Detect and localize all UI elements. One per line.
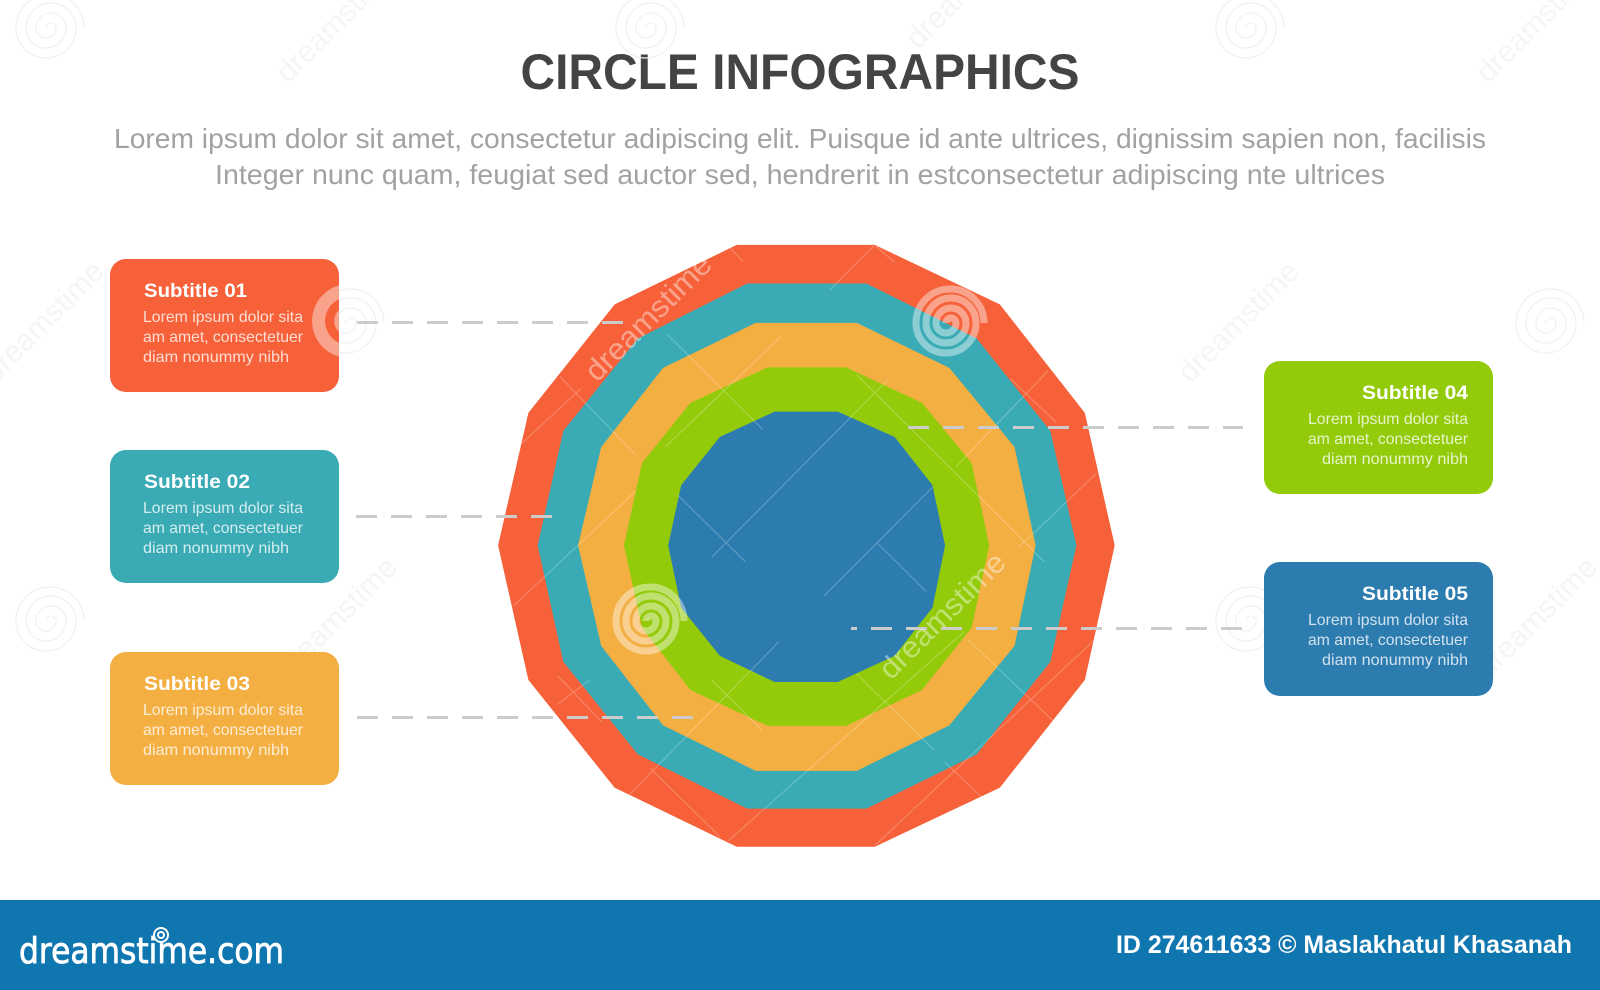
watermark part over card 1 edge (312, 285, 339, 357)
card 1: Subtitle 01 (144, 281, 247, 302)
card 5 (1264, 562, 1493, 696)
subtitle text: Lorem ipsum dolor sit amet, consectetur adipiscing elit. Puisque id ante ultrices, dignissim sapien non, facilisis (114, 123, 1486, 154)
card 4: Lorem ipsum dolor sita (1308, 411, 1468, 428)
connector line 5 (851, 627, 1243, 630)
card 3: Lorem ipsum dolor sita (143, 702, 303, 719)
card 1 (110, 259, 339, 392)
card 1: am amet, consectetuer (143, 329, 304, 346)
ring 3: amber (578, 323, 1036, 771)
text: dreamstime (270, 551, 404, 685)
connector line 1 (357, 321, 623, 324)
card 1: diam nonummy nibh (143, 349, 289, 366)
footer bar (0, 900, 1600, 990)
card 4 (1264, 361, 1493, 494)
faint page watermarks (16, 0, 1584, 651)
connector line 4 (908, 426, 1243, 429)
subtitle text (114, 123, 1486, 190)
watermark overlays on the diagram: dreamstime (873, 546, 1013, 686)
title: CIRCLE INFOGRAPHICS (520, 44, 1080, 100)
footer logo: dreamstime.com (19, 931, 284, 972)
card 3: Subtitle 03 (144, 674, 250, 695)
card 5: diam nonummy nibh (1322, 652, 1468, 669)
concentric polygon diagram (498, 245, 1115, 847)
watermark overlays on the diagram: dreamstime (579, 248, 719, 388)
connector line 2 (356, 515, 552, 518)
ring 2: teal (538, 283, 1076, 809)
card 4: Subtitle 04 (1362, 383, 1468, 404)
subtitle text: Integer nunc quam, feugiat sed auctor sed, hendrerit in estconsectetur adipiscing nte ultrices (215, 159, 1385, 190)
card 2: am amet, consectetuer (143, 520, 304, 537)
card 5: Lorem ipsum dolor sita (1308, 612, 1468, 629)
card 5: am amet, consectetuer (1308, 632, 1469, 649)
ring 5: blue core (668, 412, 945, 682)
text: dreamstime (1470, 551, 1600, 685)
card 4: diam nonummy nibh (1322, 451, 1468, 468)
image credit: ID 274611633 © Maslakhatul Khasanah (1116, 931, 1572, 959)
card 3: am amet, consectetuer (143, 722, 304, 739)
text: dreamstime (1172, 255, 1306, 389)
card 1: Lorem ipsum dolor sita (143, 309, 303, 326)
card 3 (110, 652, 339, 785)
card 3: diam nonummy nibh (143, 742, 289, 759)
card 2: Lorem ipsum dolor sita (143, 500, 303, 517)
card 2 (110, 450, 339, 583)
connector line 3 (357, 716, 693, 719)
ring 1: red orange (498, 245, 1115, 847)
card 5: Subtitle 05 (1362, 584, 1468, 605)
card 2: Subtitle 02 (144, 472, 250, 493)
watermark overlays on the diagram (312, 248, 1013, 686)
card 4: am amet, consectetuer (1308, 431, 1469, 448)
card 2: diam nonummy nibh (143, 540, 289, 557)
ring 4: green (624, 367, 989, 726)
